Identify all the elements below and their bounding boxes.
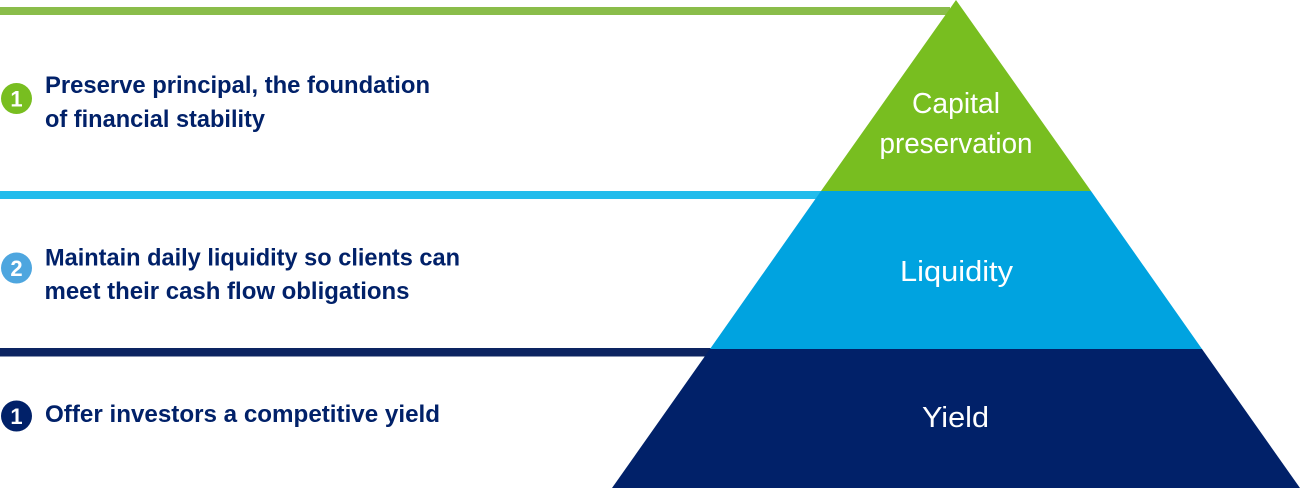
pyramid tier: capital preservation: preservation: [880, 128, 1032, 160]
connector line: liquidity: [0, 191, 825, 199]
text: preserve principal: of financial stability: [45, 106, 266, 133]
text: preserve principal: Preserve principal, the foundation: [45, 72, 430, 99]
connector line: capital preservation: [0, 7, 950, 15]
pyramid tier: capital preservation: [821, 0, 1091, 191]
pyramid tier: liquidity: [710, 191, 1202, 349]
text: maintain daily liquidity: meet their cash flow obligations: [44, 278, 410, 305]
text: maintain daily liquidity: [44, 244, 460, 305]
pyramid tier: yield: [612, 349, 1300, 488]
pyramid: [612, 0, 1300, 488]
text: preserve principal: [45, 72, 430, 133]
text: maintain daily liquidity: Maintain daily liquidity so clients can: [45, 244, 460, 272]
icon: green number badge: [1, 83, 32, 114]
icon: green number badge: 1: [10, 86, 23, 112]
item 3: yield goal: [1, 400, 440, 432]
pyramid tier: yield: Yield: [922, 402, 989, 434]
pyramid tier: capital preservation: Capital: [912, 88, 1000, 120]
icon: blue number badge: [1, 252, 32, 284]
pyramid tier: liquidity: Liquidity: [900, 256, 1014, 288]
icon: navy number badge: [1, 400, 32, 432]
icon: navy number badge: 1: [10, 404, 23, 429]
item 2: liquidity goal: [1, 244, 460, 305]
connector line: yield: [0, 348, 715, 356]
item 1: capital preservation goal: [1, 72, 430, 133]
icon: blue number badge: 2: [10, 256, 23, 281]
text: offer investors: Offer investors a competitive yield: [45, 401, 440, 428]
